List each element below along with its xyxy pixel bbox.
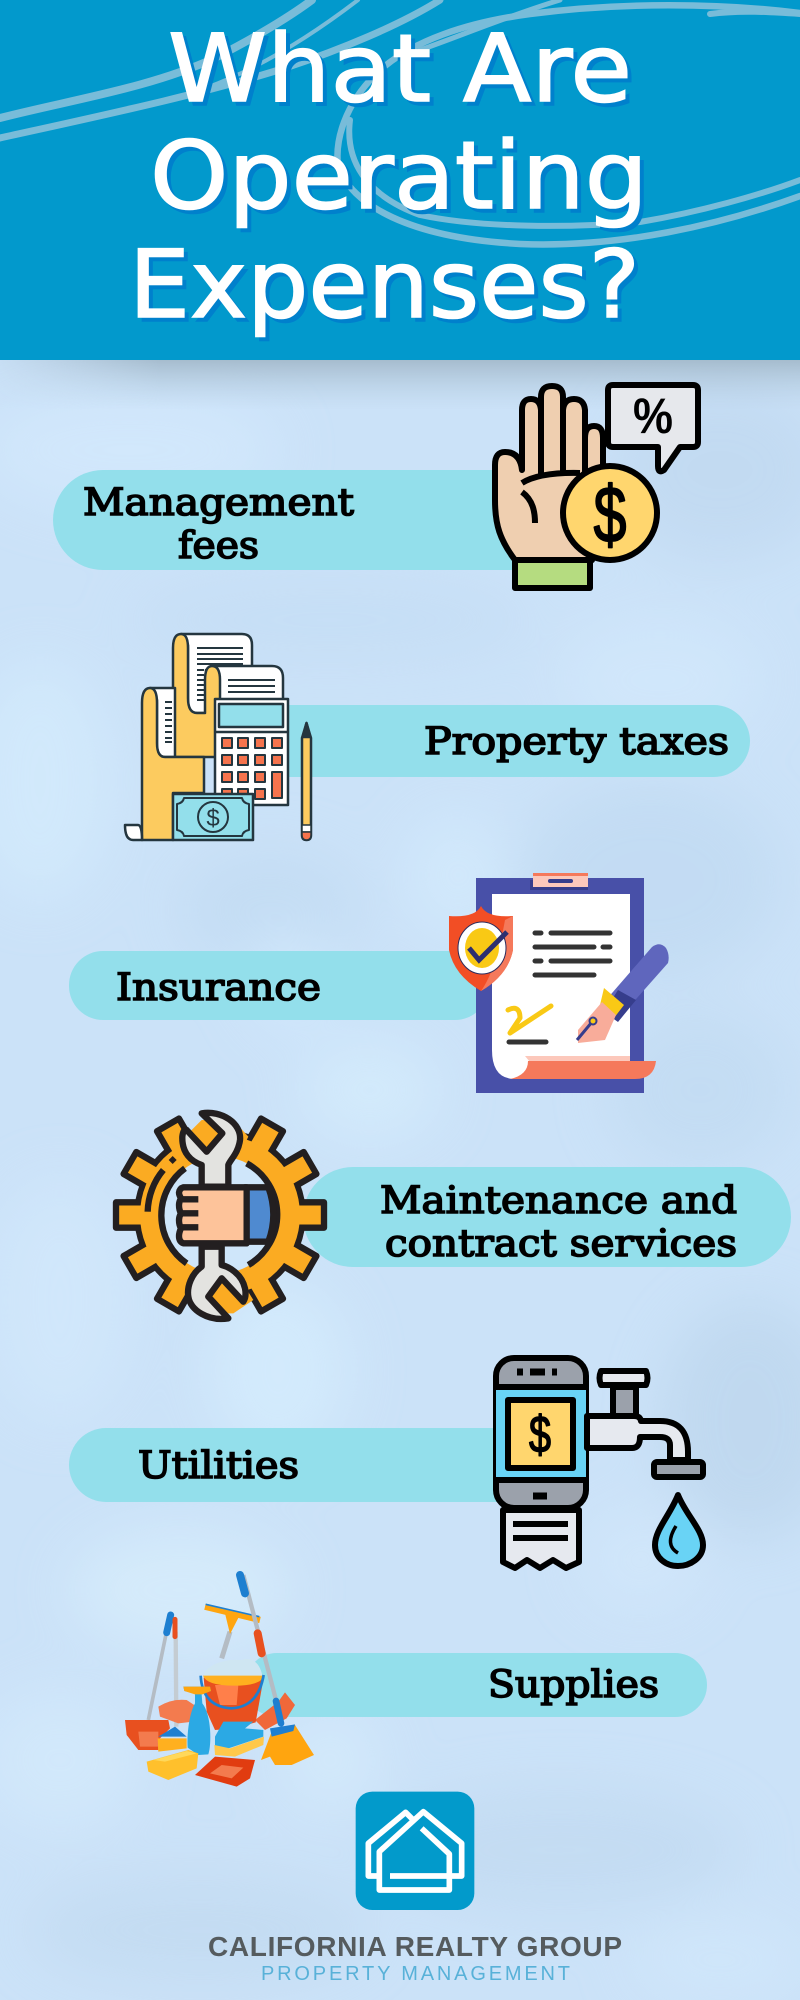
pill: maintenance and contract services xyxy=(303,1167,791,1267)
title: Operating xyxy=(154,126,652,235)
pill: supplies xyxy=(245,1653,707,1717)
icon: receipts, calculator, bill and pencil xyxy=(125,634,311,840)
icon: hand with coin and percent bubble: $ xyxy=(594,470,626,559)
icon: receipts, calculator, bill and pencil: $ xyxy=(206,805,220,832)
header shadow xyxy=(16,360,800,396)
title xyxy=(129,15,652,344)
pill: maintenance and contract services: contract services xyxy=(385,1222,737,1265)
title: Expenses? xyxy=(129,231,640,340)
title: Expenses? xyxy=(133,235,644,344)
icon: hand with coin and percent bubble xyxy=(495,385,698,588)
icon: gear with wrench and hand xyxy=(116,1113,324,1319)
icon: clipboard, shield and pen xyxy=(449,873,669,1093)
icon: phone tap with water drop: $ xyxy=(529,1406,551,1464)
icon: phone tap with water drop xyxy=(496,1358,703,1568)
pill: maintenance and contract services: Maintenance and xyxy=(380,1179,737,1222)
title: What Are xyxy=(168,15,632,124)
pill: property taxes: Property taxes xyxy=(424,720,729,763)
header swirl strokes xyxy=(0,0,800,244)
icon: hand with coin and percent bubble: % xyxy=(633,388,673,444)
pill: supplies: Supplies xyxy=(488,1663,659,1706)
title: Operating xyxy=(150,122,648,231)
pill: management fees: Management xyxy=(83,481,354,524)
header banner xyxy=(0,0,800,360)
logo: California Realty Group xyxy=(208,1792,622,1985)
icon: cleaning supplies xyxy=(125,1575,314,1787)
logo mark xyxy=(356,1792,474,1910)
title: What Are xyxy=(172,19,636,128)
pill: insurance: Insurance xyxy=(116,966,321,1009)
pill: management fees: fees xyxy=(178,524,259,567)
pill: utilities: Utilities xyxy=(138,1444,299,1487)
pill: insurance xyxy=(69,951,489,1020)
pill: management fees xyxy=(53,470,520,570)
logo wordmark: CALIFORNIA REALTY GROUP xyxy=(208,1931,622,1962)
pill: utilities xyxy=(69,1428,498,1502)
logo tagline: PROPERTY MANAGEMENT xyxy=(261,1963,570,1985)
pill: property taxes xyxy=(285,705,750,777)
